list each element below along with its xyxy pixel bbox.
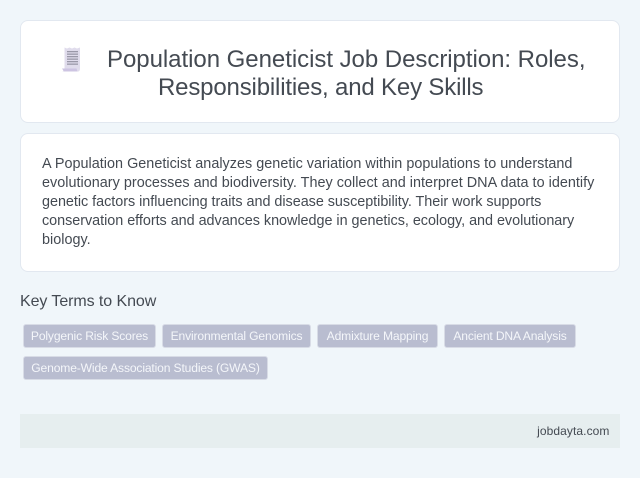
tag [23, 324, 156, 348]
tag: Admixture Mapping [327, 329, 428, 343]
title: Population Geneticist Job Description: Roles, [107, 46, 585, 73]
title [107, 46, 585, 101]
tag [317, 324, 438, 348]
description text: genetic factors influencing traits and disease susceptibility. Their work supports [42, 194, 541, 210]
tag: Genome-Wide Association Studies (GWAS) [31, 361, 260, 375]
tag [23, 356, 268, 380]
title: Responsibilities, and Key Skills [158, 74, 483, 101]
tag: Environmental Genomics [171, 329, 302, 343]
tag [444, 324, 576, 348]
heading: key terms: Key Terms to Know [20, 293, 156, 310]
footer text: jobdayta.com [537, 424, 610, 438]
tag: Polygenic Risk Scores [31, 329, 148, 343]
tags [23, 324, 576, 380]
tag: Ancient DNA Analysis [453, 329, 567, 343]
description panel [20, 133, 620, 272]
description text: conservation efforts and advances knowledge in genetics, ecology, and evolutionary [42, 213, 574, 229]
tag [162, 324, 311, 348]
icon: document scroll [62, 48, 80, 72]
description text [42, 156, 594, 248]
header panel [20, 20, 620, 123]
footer bar [20, 414, 620, 448]
description text: evolutionary processes and biodiversity. They collect and interpret DNA data to identify [42, 175, 594, 191]
description text: A Population Geneticist analyzes genetic variation within populations to understand [42, 156, 572, 172]
description text: biology. [42, 232, 91, 248]
